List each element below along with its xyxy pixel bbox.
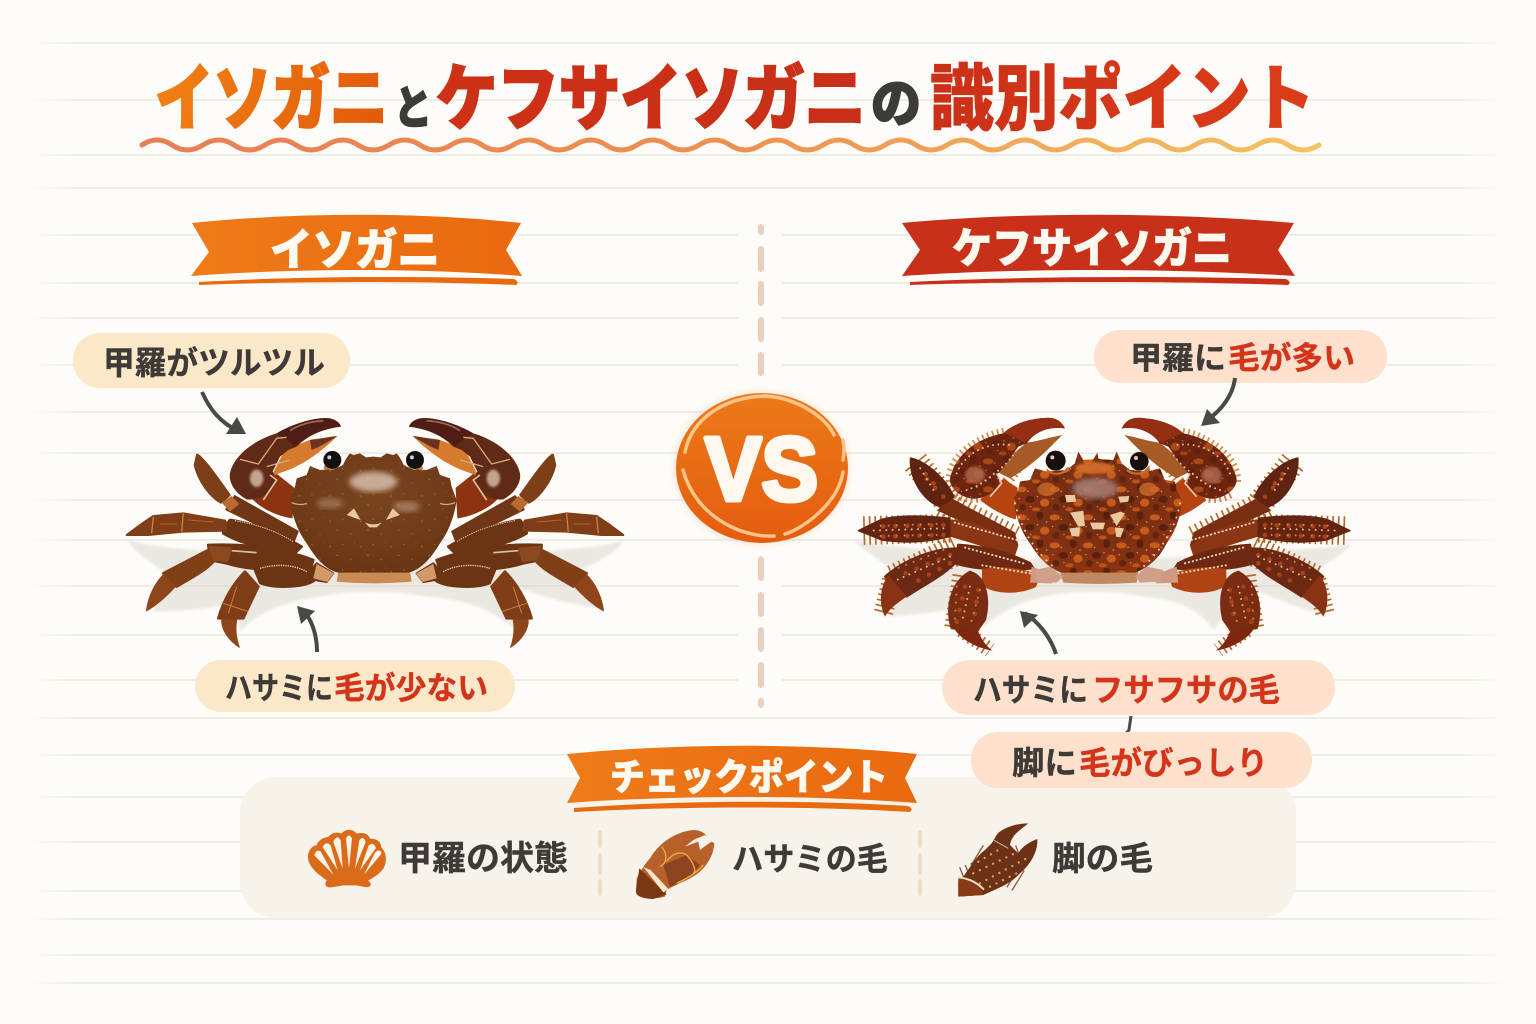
icon: scallop shell (308, 830, 386, 887)
left claw (950, 418, 1065, 518)
text: 脚の毛: 脚の毛 (1052, 840, 1153, 877)
callout: ハサミにフサフサの毛 (942, 660, 1335, 715)
callout: 脚に毛がびっしり (971, 732, 1312, 788)
banner: チェックポイント (567, 746, 917, 812)
title: の (871, 76, 921, 134)
arrow: to right crab underside (1020, 611, 1056, 654)
check point panel (240, 777, 1296, 918)
callout: ハサミにフサフサの毛: ハサミに (973, 672, 1088, 708)
callout: 甲羅に毛が多い: 毛が多い (1228, 341, 1355, 376)
right claw (1122, 418, 1237, 518)
banner: チェックポイント: チェックポイント (610, 757, 888, 798)
VS badge (674, 391, 850, 545)
left banner: イソガニ: イソガニ (270, 226, 440, 275)
callout: 甲羅がツルツル (73, 333, 350, 388)
right banner: ケフサイソガニ (902, 215, 1295, 285)
title: と (394, 82, 432, 134)
callout: 脚に毛がびっしり: 脚に (1012, 745, 1077, 781)
title wavy underline (142, 140, 1319, 150)
arrow: to left crab underside (297, 606, 317, 652)
left legs (858, 458, 1058, 651)
right crab: ケフサイソガニ (853, 418, 1352, 651)
carapace (1013, 452, 1182, 584)
arrow: to right crab (1201, 378, 1235, 426)
left legs and claw (127, 418, 341, 647)
right banner: ケフサイソガニ: ケフサイソガニ (952, 225, 1232, 272)
callout: 甲羅がツルツル: 甲羅がツルツル (103, 345, 325, 381)
text: ハサミの毛: ハサミの毛 (732, 841, 888, 877)
callout: ハサミにフサフサの毛: フサフサの毛 (1092, 672, 1280, 708)
text: 甲羅の状態: 甲羅の状態 (398, 840, 568, 878)
callout: ハサミに毛が少ない: 毛が少ない (334, 671, 488, 706)
arrow: to left carapace claw (202, 392, 246, 434)
crab shadow (127, 540, 624, 633)
right legs (1150, 458, 1350, 651)
callout: 甲羅に毛が多い: 甲羅に (1130, 341, 1226, 376)
right legs and claw (409, 418, 623, 647)
icon: hairy leg (958, 823, 1037, 897)
title (155, 60, 1315, 140)
left crab: イソガニ (127, 418, 624, 647)
title: ケフサイソガニ (436, 60, 866, 140)
icon: claw (636, 830, 714, 899)
eyes (323, 451, 424, 473)
callout: 甲羅に毛が多い (1094, 330, 1387, 383)
crab shadow (853, 540, 1352, 630)
carapace (290, 453, 457, 583)
panel separators (600, 832, 920, 894)
title: 識別ポイント (930, 60, 1315, 140)
eyes (1046, 451, 1150, 475)
connector between callouts (1124, 716, 1131, 736)
callout: ハサミに毛が少ない (195, 660, 515, 712)
VS badge: VS (705, 420, 818, 520)
center dashed divider (758, 227, 764, 705)
callout: 脚に毛がびっしり: 毛がびっしり (1079, 745, 1268, 781)
title: イソガニ (155, 60, 388, 140)
left banner: イソガニ (191, 215, 522, 285)
callout: ハサミに毛が少ない: ハサミに (225, 671, 333, 706)
